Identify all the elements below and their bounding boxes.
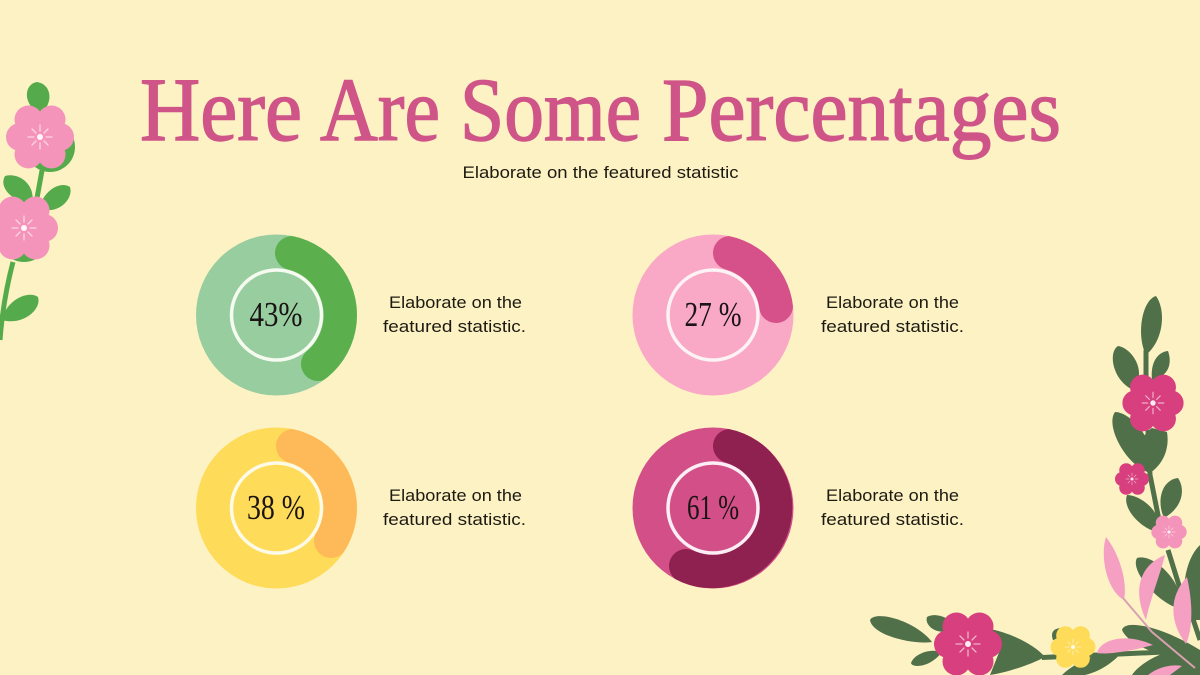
title: Percentages (662, 61, 1061, 160)
label: 43%: featured statistic. (383, 317, 526, 336)
value: 61%: 61 % (687, 488, 739, 527)
title (140, 61, 1061, 160)
value: 38%: 38 % (247, 488, 305, 527)
label: 43% (383, 293, 526, 336)
value: 43%: 43% (250, 295, 302, 334)
value: 27%: 27 % (684, 295, 742, 334)
floral decoration: right branch (1112, 296, 1200, 640)
icon: magenta flower large (1122, 375, 1184, 431)
floral decoration: bottom branch (870, 537, 1200, 675)
title: Some (460, 61, 641, 160)
icon: magenta flower bottom (934, 612, 1002, 675)
label: 38% (383, 486, 526, 529)
label: 27% (821, 293, 964, 336)
donut chart: 38% (196, 428, 357, 588)
label: 43%: Elaborate on the (389, 293, 522, 312)
icon: pink flower upper (6, 106, 74, 168)
label: 27%: featured statistic. (821, 317, 964, 336)
label: 38%: featured statistic. (383, 510, 526, 529)
label: 61%: Elaborate on the (826, 486, 959, 505)
icon: yellow flower (1051, 626, 1095, 668)
icon: light pink flower (1151, 516, 1187, 548)
label: 27%: Elaborate on the (826, 293, 959, 312)
floral decoration: left branch (0, 82, 75, 340)
icon: magenta flower small (1115, 463, 1149, 495)
subtitle: Elaborate on the featured statistic (462, 163, 739, 182)
title: Here (140, 61, 302, 160)
donut chart: 27% (632, 234, 794, 396)
donut chart: 43% (196, 234, 357, 396)
icon: pink flower lower (0, 196, 58, 260)
label: 61% (821, 486, 964, 529)
title: Are (320, 61, 440, 160)
donut chart: 61% (632, 428, 794, 588)
label: 38%: Elaborate on the (389, 486, 522, 505)
label: 61%: featured statistic. (821, 510, 964, 529)
